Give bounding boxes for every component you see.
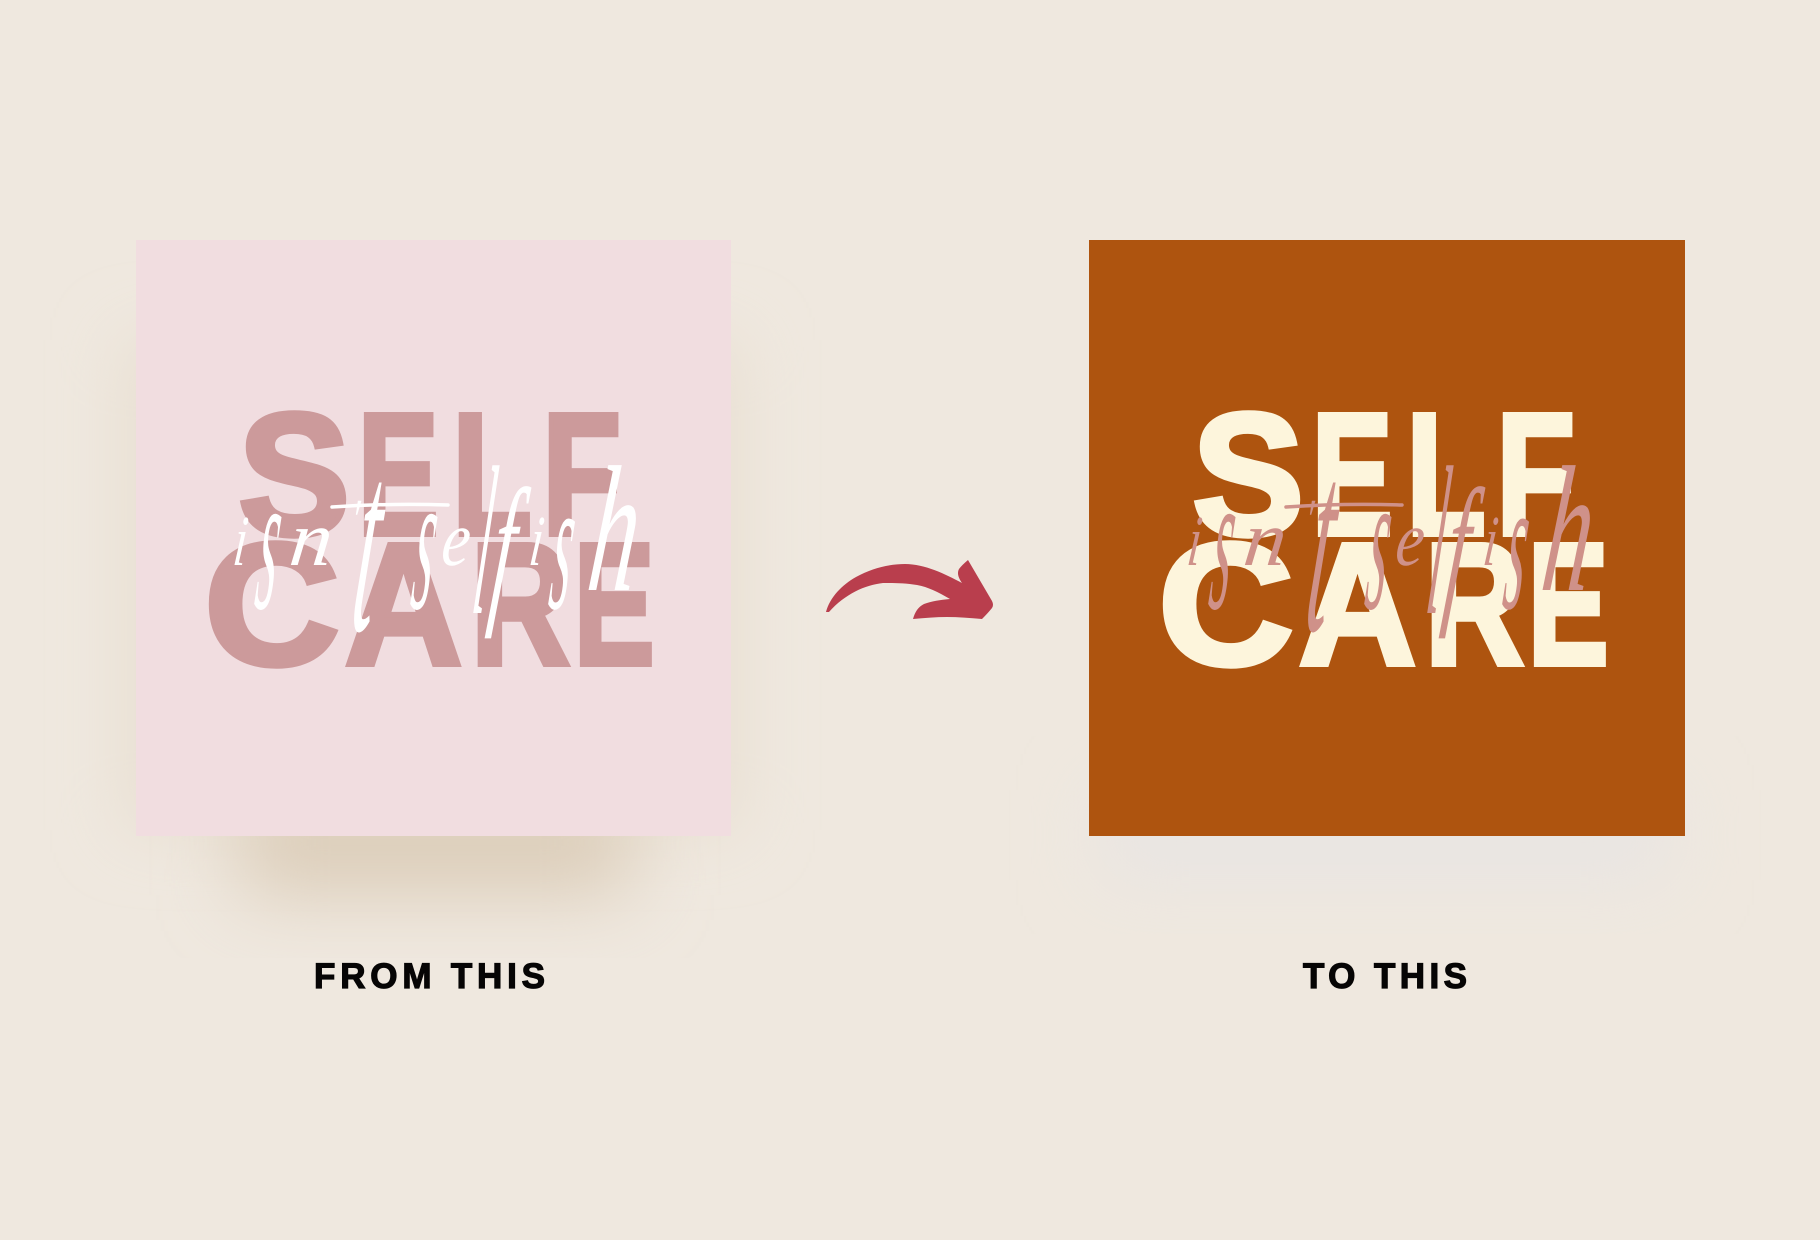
label: to this: TO THIS xyxy=(1303,957,1467,996)
script text: isn't selfish (white): t xyxy=(342,397,399,687)
heading: self care (muted): S xyxy=(238,377,350,571)
script text: isn't selfish (white) xyxy=(218,397,654,687)
heading: self care (muted): E xyxy=(358,377,438,571)
heading: self care (cream): R xyxy=(1425,507,1524,701)
panel: from this xyxy=(136,240,731,836)
script text: isn't selfish (white): n xyxy=(286,495,338,582)
heading: self care (cream): E xyxy=(1528,507,1608,701)
script text: isn't selfish (dusty rose): f xyxy=(1438,456,1489,640)
script text: isn't selfish (dusty rose): e xyxy=(1392,495,1430,582)
heading: self care (muted): F xyxy=(542,377,621,571)
script text: isn't selfish (white): s xyxy=(248,431,293,652)
script text: isn't selfish (dusty rose): l xyxy=(1419,425,1459,660)
script text: isn't selfish (white): ' xyxy=(347,487,363,554)
script text: isn't selfish (white): l xyxy=(465,425,505,660)
script text: isn't selfish (dusty rose): s xyxy=(1358,431,1403,652)
arrow xyxy=(826,560,993,619)
heading: self care (cream): E xyxy=(1312,377,1392,571)
heading: self care (muted): C xyxy=(204,507,339,701)
heading: self care (muted): L xyxy=(452,377,532,571)
script text: isn't selfish (dusty rose): s xyxy=(1496,440,1540,650)
script text: isn't selfish (dusty rose): ' xyxy=(1301,487,1317,554)
script text: isn't selfish (white): s xyxy=(404,431,449,652)
heading: self care (cream): C xyxy=(1158,507,1293,701)
label: from this: FROM THIS xyxy=(314,957,545,996)
heading: self care (cream): A xyxy=(1299,507,1416,701)
script text: isn't selfish (dusty rose): i xyxy=(1480,501,1502,581)
script text: isn't selfish (dusty rose): n xyxy=(1240,495,1292,582)
script text: isn't selfish (white): f xyxy=(484,456,535,640)
script text: isn't selfish (white): e xyxy=(438,495,476,582)
heading: self care (cream): F xyxy=(1496,377,1575,571)
script text: isn't selfish (dusty rose): t xyxy=(1296,397,1353,687)
heading: self care (cream): S xyxy=(1192,377,1304,571)
script text: isn't selfish (dusty rose): i xyxy=(1184,501,1206,581)
heading: self care (muted) xyxy=(204,377,654,701)
heading: self care (cream) xyxy=(1158,377,1608,701)
script text: isn't selfish (dusty rose): h xyxy=(1535,430,1605,630)
script text: isn't selfish (dusty rose) xyxy=(1172,397,1608,687)
heading: self care (muted): R xyxy=(471,507,570,701)
heading: self care (muted): A xyxy=(345,507,462,701)
script text: isn't selfish (white): h xyxy=(581,430,651,630)
panel: to this xyxy=(1089,240,1685,836)
heading: self care (cream): L xyxy=(1406,377,1486,571)
script text: isn't selfish (white): i xyxy=(526,501,548,581)
script text: isn't selfish (white): i xyxy=(230,501,252,581)
heading: self care (muted): E xyxy=(574,507,654,701)
script text: isn't selfish (dusty rose): s xyxy=(1202,431,1247,652)
script text: isn't selfish (white): s xyxy=(542,440,586,650)
